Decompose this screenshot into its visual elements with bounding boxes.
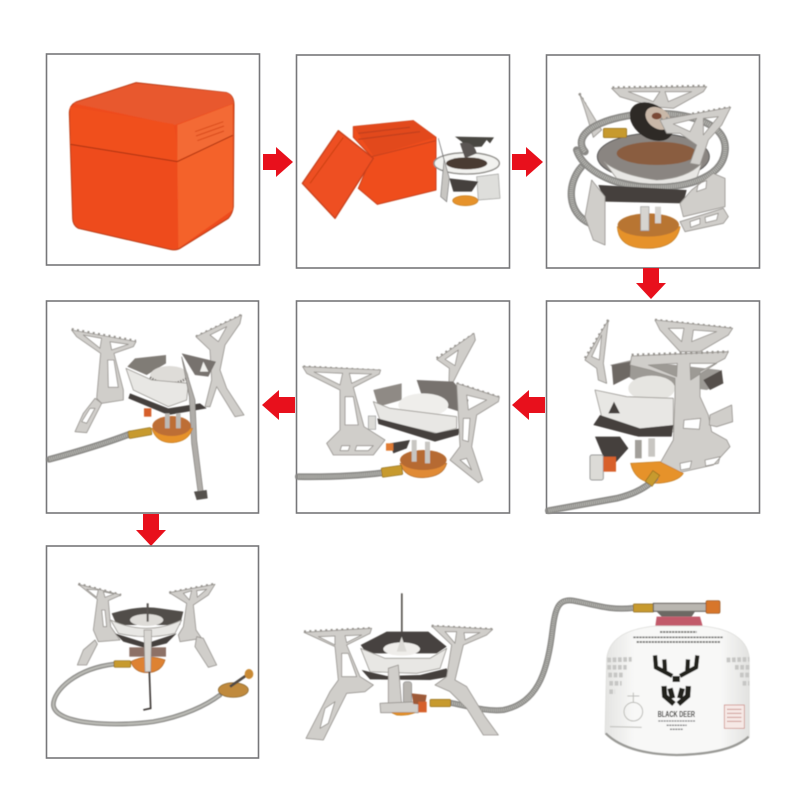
- assembled stove connected to gas canister: [304, 593, 749, 756]
- panel 6: trivets further opened: [46, 301, 258, 513]
- icon: closed box: [69, 83, 234, 250]
- coiled hose: [571, 113, 725, 223]
- gas connector: [218, 683, 248, 697]
- arrow: step 4 to 5: [512, 390, 545, 420]
- stove: [304, 593, 498, 740]
- arrow: step 5 to 6: [262, 390, 295, 420]
- icon: opened stove with one leg forward: [49, 315, 244, 500]
- arrow: step 6 to 7: [136, 514, 166, 546]
- box lid: [302, 131, 373, 218]
- panel 1: closed orange box: [46, 54, 260, 265]
- panel 4: trivets half opened, front view: [546, 301, 760, 513]
- box base: [353, 121, 436, 204]
- icon: open box with folded stove: [302, 121, 500, 218]
- small folded stove: [434, 137, 500, 206]
- hose: [49, 434, 130, 459]
- label lines: [633, 632, 723, 642]
- honeycomb pattern: [607, 659, 749, 692]
- brand name: BLACK DEER: [658, 710, 695, 719]
- hose: [298, 473, 383, 477]
- icon: opened stove with connector: [53, 584, 253, 724]
- icon: opening stove: [298, 333, 499, 483]
- gas canister: [605, 617, 749, 756]
- front trivet: [661, 107, 730, 119]
- icon: folded stove: [571, 86, 731, 248]
- panel 5: trivets opening, three-quarter view: [296, 301, 510, 513]
- arrow: step 3 to 4: [636, 268, 666, 299]
- gas valve connector: [633, 601, 720, 617]
- panel 2: open box with stove: [296, 55, 510, 268]
- panel 7: fully opened stove with hose: [46, 546, 258, 758]
- hose: [548, 478, 655, 511]
- panel 3: folded stove with coiled hose: [546, 55, 760, 268]
- warning label: [724, 705, 744, 728]
- hose: [450, 600, 633, 710]
- icon: half-opened stove: [548, 320, 733, 511]
- safety icon: [610, 693, 643, 727]
- arrow: step 2 to 3: [512, 147, 543, 177]
- hose: [53, 664, 220, 724]
- lower body: [598, 185, 687, 203]
- valve wheel: [622, 94, 681, 149]
- arrow: step 1 to 2: [263, 147, 293, 177]
- black deer logo: [655, 655, 697, 704]
